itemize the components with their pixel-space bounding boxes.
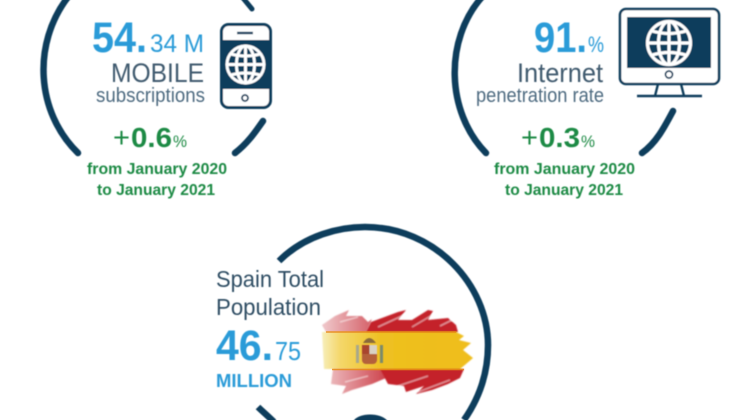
label: MILLION: MILLION [216,371,292,391]
panel: internet penetration [455,0,719,199]
panel: mobile subscriptions [44,0,271,199]
period: from January 2020 to January 2021 [494,161,635,199]
value: 54.34 M [92,14,204,62]
label: Internet: Internet [517,58,603,88]
period: from January 2020 to January 2021: from January 2020 [494,161,635,178]
label: subscriptions: subscriptions [96,85,205,107]
flag: yellow band [322,332,473,369]
change: +0.6%: % [173,132,187,151]
period: from January 2020 to January 2021 [87,161,227,199]
flag: bottom red band [380,369,464,394]
value: 46.75: 75 [275,336,301,366]
change: +0.3%: + [521,122,538,153]
flag: brush streaks [340,314,452,392]
change: +0.6%: 0.6 [131,122,172,153]
icon: phone with globe [221,24,271,108]
flag: coat of arms [356,338,383,364]
change: +0.3% [521,122,595,153]
flag: top left faded strokes [322,310,372,332]
ring: internet [455,0,673,153]
ring: population [258,227,488,420]
period: from January 2020 to January 2021: from January 2020 [87,161,227,178]
ring: mobile [44,0,263,153]
panel: Spain total population [216,227,488,420]
value: 91.%: 91. [534,14,587,62]
change: +0.6%: + [113,122,130,153]
label: MOBILE: MOBILE [111,58,204,88]
label: Spain Total Population: Spain Total [216,266,324,292]
period: from January 2020 to January 2021: to January 2021 [505,182,623,199]
label: penetration rate: penetration rate [476,85,604,107]
value: 54.34 M: 54. [92,14,147,62]
change: +0.3%: 0.3 [539,122,580,153]
value: 54.34 M: 34 M [150,30,204,58]
period: from January 2020 to January 2021: to January 2021 [97,182,215,199]
label: Spain Total Population [216,266,324,320]
flag: orange edges [326,332,464,370]
flag: bottom left faded strokes [331,369,386,394]
value: 91.%: % [588,32,604,57]
icon: monitor with globe [620,9,719,96]
change: +0.3%: % [581,132,595,151]
label: Spain Total Population: Population [216,294,321,320]
icon: Spanish flag brush stroke [322,310,473,394]
change: +0.6% [113,122,187,153]
value: 46.75: 46. [216,322,273,370]
flag: top red band [366,310,458,332]
